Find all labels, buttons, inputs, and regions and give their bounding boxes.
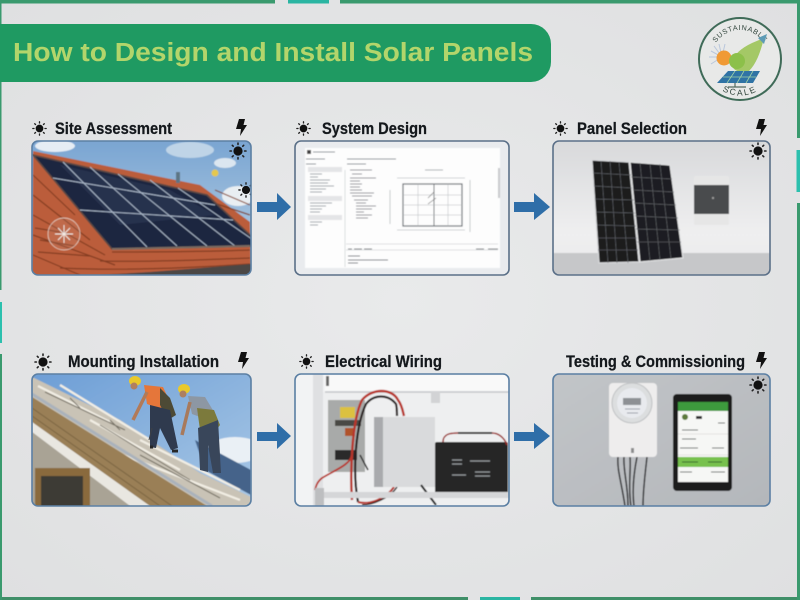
icon: lightning bolt: [756, 352, 767, 369]
photo: solar panels on tiled roof: [32, 140, 262, 275]
heading: Testing & Commissioning: Testing & Commissioning: [566, 353, 745, 371]
logo icon: sun, leaf and panel: [709, 34, 767, 87]
icon: sun in photo: [750, 377, 766, 393]
panel: System Design: [295, 120, 509, 275]
panel: Testing & Commissioning: [553, 352, 770, 506]
heading: Panel Selection: Panel Selection: [577, 120, 687, 138]
icon: lightning bolt: [238, 352, 249, 369]
heading: Mounting Installation: Mounting Installation: [68, 353, 219, 371]
arrow: mounting installation to electrical wiring: [257, 423, 291, 449]
heading: System Design: System Design: [322, 120, 427, 138]
icon: sun at edge: [239, 183, 253, 197]
figure: worker in orange shirt: [129, 376, 178, 451]
screenshot: solar design software: [295, 141, 509, 275]
icon: sun in photo: [230, 143, 246, 159]
logo: Sustainable Scale: [698, 17, 782, 101]
panel: Electrical Wiring: [295, 353, 509, 506]
panel: Site Assessment: [32, 119, 262, 275]
heading: Site Assessment: Site Assessment: [55, 120, 172, 138]
logo text: bottom arc: SCALE: [723, 86, 756, 96]
panel: Mounting Installation: [32, 352, 263, 506]
arrow: electrical wiring to testing and commissioning: [514, 423, 550, 449]
figure: worker in grey shirt: [178, 384, 221, 473]
photo: wiring, junction box and battery: [295, 374, 509, 506]
icon: sun in photo: [750, 143, 766, 159]
photo: workers installing mounting rails: [32, 374, 263, 506]
photo: two solar panels and inverter: [553, 141, 770, 275]
panel: Panel Selection: [553, 119, 770, 275]
logo text: top arc: SUSTAINABLE: [712, 25, 768, 42]
photo: smart meter and monitoring tablet: [553, 374, 770, 506]
icon: lightning bolt: [236, 119, 247, 136]
title banner: [0, 24, 551, 82]
heading: Electrical Wiring: Electrical Wiring: [325, 353, 442, 371]
title: How to Design and Install Solar Panels: [13, 39, 533, 67]
icon: lightning bolt: [756, 119, 767, 136]
arrow: system design to panel selection: [514, 193, 550, 220]
arrow: site assessment to system design: [257, 193, 291, 220]
